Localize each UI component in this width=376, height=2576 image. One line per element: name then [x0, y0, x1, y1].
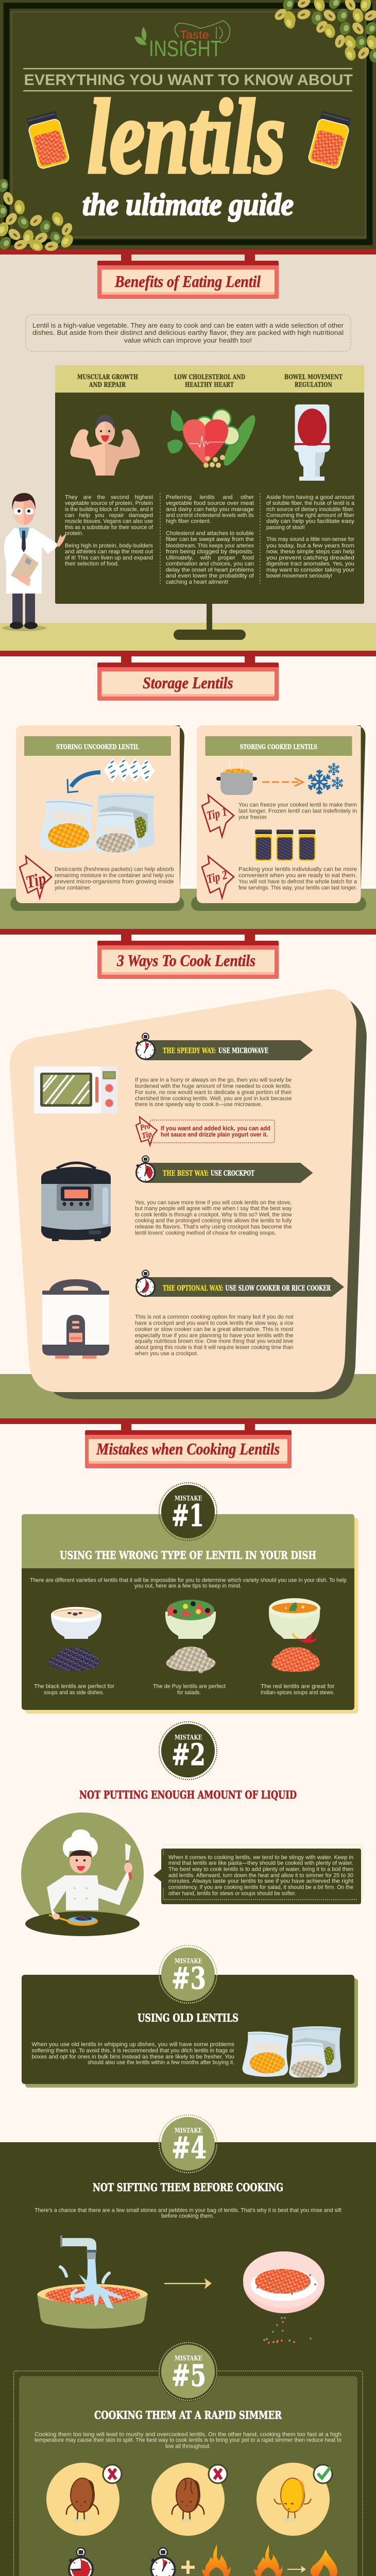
- badge: mistake 2: MISTAKE: [175, 1734, 202, 1741]
- hero frame: [6, 6, 370, 242]
- text: speedy way: cherished time cooking lentils. Well, you are just in luck because: [135, 1095, 292, 1101]
- mistake 5 text: Cooking them too long will lead to mushy and overcooked lentils. On the other hand, cooking them too fast at a high: [35, 2432, 341, 2438]
- icon: snowflakes: [307, 763, 344, 794]
- mistake 5 text: low all throughout.: [165, 2443, 211, 2449]
- tip 2 callout: [202, 856, 357, 898]
- column 3 text: you today, but a few years from: [266, 543, 354, 549]
- text: optional way: This is not a common cooking option for many but if you do not: [135, 1314, 294, 1320]
- banner: speedy way: USE MICROWAVE: [218, 1047, 268, 1055]
- arrow: packets to bags: [67, 772, 100, 792]
- icon: short timer plus flame: [151, 2544, 230, 2576]
- character: well cooked lentil: [257, 2463, 332, 2536]
- banner: optional way: USE SLOW COOKER OR RICE COOKER: [226, 1284, 331, 1293]
- text: speedy way: there is one speedy way to cook it—use microwave.: [135, 1101, 262, 1108]
- text: optional way: equally nutritious brown rice. One more thing that you would love: [135, 1338, 294, 1345]
- column 1 text: vegetable source of protein. Protein: [65, 500, 153, 506]
- badge: mistake 5: [158, 2342, 218, 2401]
- column 1 text: Being high in protein, body-builders: [65, 543, 153, 549]
- column 2 text: [166, 495, 254, 585]
- tip callout: Tip: [24, 869, 48, 892]
- column 2 text: and even lower the probability of: [166, 573, 254, 579]
- illustration: chef: [21, 1812, 144, 1936]
- text: speedy way: If you are in a hurry or always on the go, then you will surely be: [135, 1077, 292, 1083]
- column 3 text: daily can help you facilitate easy: [266, 518, 355, 524]
- speech box: mistake 2: mind that lentils are like pasta—they should be cooked with plenty of water.: [168, 1860, 353, 1866]
- mistake 1 intro: you out, here are a few tips to keep in mind.: [134, 1583, 242, 1589]
- tip callout: [20, 856, 174, 898]
- tip 2 callout: You will not have to defrost the whole batch for a: [238, 879, 357, 885]
- lentils corner: bottom left: [0, 178, 76, 253]
- column 2 text: from being clogged by deposits.: [166, 549, 254, 555]
- text: optional way: about going this route is that it will require lesser cooking time than: [135, 1345, 294, 1351]
- mistake 3 text: boxes and opt for ones in bulk bins instead as these are likely to be fresher. You: [32, 2054, 234, 2060]
- column 2 text: vegetable food source over meat: [166, 500, 254, 506]
- benefit headings: [77, 374, 343, 389]
- speech box: mistake 2: When it comes to cooking lentils, we tend to be stingy with water. Keep in: [168, 1855, 353, 1861]
- tip 1 callout: You can freeze your cooked lentil to make them: [238, 802, 357, 808]
- sign: storage: [97, 656, 279, 701]
- badge: mistake 1: MISTAKE: [175, 1495, 202, 1502]
- icon: salad bowl: [165, 1600, 216, 1639]
- text: speedy way: burdened with the huge amount of time needed to cook lentils.: [135, 1083, 292, 1089]
- logo: Taste: [180, 28, 209, 41]
- tip 1 callout: Tip 1: [205, 805, 229, 823]
- text: optional way: cooker or slow cooker can be a great alternative. This is most: [135, 1326, 294, 1332]
- panel: storing cooked lentils: STORING COOKED LENTILS: [240, 743, 317, 751]
- column 1 text: of it! This can liven up and expand: [65, 555, 153, 561]
- column 2 text: high fiber content.: [166, 518, 211, 524]
- column 1 text: and athletes can reap the most out: [65, 549, 153, 555]
- icon: red lentils: [271, 1647, 320, 1672]
- text: optional way: [134, 1314, 294, 1357]
- sign: benefits: [97, 255, 279, 299]
- column 3 text: Aside from having a good amount: [266, 495, 354, 501]
- column 2 text: and control cholesterol levels with its: [166, 512, 254, 518]
- column 3 text: now, these simple steps can help: [266, 549, 354, 555]
- mistake 3 text: [32, 2041, 235, 2066]
- column 2 text: Ultimately, with proper food: [166, 555, 254, 561]
- tip 2 callout: Packing your lentils individually can be more: [238, 867, 357, 873]
- mistake 3 heading: USING OLD LENTILS: [138, 2011, 238, 2024]
- intro text box: value which can improve your health too!: [124, 336, 252, 344]
- badge: mistake 4: #4: [172, 2130, 207, 2165]
- benefit headings: BOWEL MOVEMENT: [284, 374, 343, 381]
- text: best way: to cook lentils is through a crockpot. Why is this so? Well, the slow: [135, 1212, 292, 1218]
- badge: mistake 2: #2: [172, 1737, 206, 1772]
- mistake 4 text: [35, 2207, 341, 2219]
- icon: jars of black lentils: [254, 829, 316, 861]
- badge: mistake 3: MISTAKE: [175, 1958, 202, 1965]
- icon: right jar: [307, 111, 352, 170]
- hero title: lentils: [88, 78, 285, 195]
- tip callout: your container.: [55, 885, 91, 891]
- column 3 text: bowel movement seriously!: [266, 573, 332, 579]
- doctor figure: [2, 493, 66, 631]
- icon: crockpot: [41, 1163, 111, 1241]
- board stand: [174, 603, 246, 640]
- text: optional way: especially true if you are planning to have your lentils with the: [135, 1332, 294, 1338]
- panel: mistake 1 card: [22, 1483, 358, 1714]
- icon: curry bowl: [269, 1598, 320, 1643]
- column 2 text: and dairy can help you manage: [166, 506, 254, 513]
- intro text box: dishes. But aside from their distinct and delicious earthy flavor, they are packed with high nutritional: [32, 329, 344, 336]
- benefit headings: AND REPAIR: [89, 381, 126, 389]
- text: best way: Yes, you can save more time if you will cook lentils on the stove,: [135, 1199, 292, 1206]
- column 2 text: catching a heart ailment!: [166, 579, 229, 585]
- logo: INSIGHT: [149, 36, 221, 61]
- benefit columns: [65, 493, 355, 585]
- speech box: mistake 2: The best way to cook lentils is to add plenty of water, bring it to a boil then: [168, 1866, 353, 1872]
- text: best way: lentil lovers' cooking method of choice for creating soups.: [135, 1230, 276, 1236]
- falling stones: [263, 2317, 312, 2344]
- banner: best way: [136, 1156, 313, 1183]
- icon: de puy lentils: [166, 1647, 215, 1673]
- panel: benefits board: [55, 365, 364, 604]
- column 3 text: may want to consider taking your: [266, 567, 354, 573]
- speech box: mistake 2: consistency. If you are cooking lentils for salad, it should be a bit firm. On the: [168, 1885, 353, 1891]
- pro tip callout: Pro: [139, 1122, 151, 1132]
- pro tip callout: [136, 1117, 275, 1145]
- text: best way: release its flavors. That's why using crockpot has become the: [135, 1224, 292, 1230]
- pro tip callout: Tip: [141, 1130, 153, 1141]
- pro tip callout: hot sauce and drizzle plain yogurt over it.: [161, 1131, 268, 1138]
- tip 1 callout: last longer. Frozen lentil can last indefinitely in: [238, 808, 357, 814]
- text: best way: cooking and the prolonged cooking time allows the lentils to fully: [135, 1218, 292, 1224]
- banner: speedy way: [136, 1033, 313, 1060]
- mistake 5 heading: COOKING THEM AT A RAPID SIMMER: [94, 2409, 282, 2421]
- column 3 text: passing of stool!: [266, 524, 305, 531]
- tip 2 callout: few servings. This way, your lentils can last longer.: [238, 885, 357, 891]
- benefit headings: MUSCULAR GROWTH: [77, 374, 138, 381]
- column 3 text: digestive tract anomalies. Yes, you: [266, 561, 354, 567]
- sign: benefits: Benefits of Eating Lentil: [114, 272, 261, 291]
- captions: Indian-spices soups and stews.: [261, 1690, 335, 1696]
- character: split lentil: [151, 2463, 227, 2536]
- column 1 text: [65, 495, 153, 567]
- badge: mistake 4: [159, 2115, 217, 2173]
- pro tip callout: If you want and added kick, you can add: [161, 1125, 270, 1132]
- benefit headings: HEALTHY HEART: [185, 381, 234, 389]
- captions: The de Puy lentils are perfect: [153, 1684, 226, 1690]
- panel: mistake 3 card: [22, 1945, 358, 2088]
- column 3 text: of soluble fiber, the husk of lentil is a: [266, 500, 355, 506]
- sign: mistakes: Mistakes when Cooking Lentils: [96, 1439, 280, 1458]
- column 3 text: rich source of dietary insoluble fiber.: [266, 506, 354, 513]
- lentils corner: top right: [272, 0, 376, 62]
- text: speedy way: For sure, no one would want to dedicate a great portion of their: [135, 1089, 292, 1095]
- badge: mistake 5: MISTAKE: [175, 2354, 202, 2363]
- badge: mistake 4: MISTAKE: [175, 2127, 202, 2135]
- column 2 text: Cholesterol and attaches to soluble: [166, 531, 254, 537]
- column 1 text: can help you repair damaged: [65, 512, 153, 518]
- captions: The red lentils are great for: [261, 1684, 335, 1690]
- captions: soups and as side dishes.: [44, 1690, 104, 1696]
- mistake 4 text: There's a chance that there are a few small stones and pebbles in your bag of lentils. That's why it is best that you rinse and sift: [35, 2207, 341, 2213]
- column 1 text: is the building block of muscle, and it: [65, 506, 153, 513]
- column 1 text: this as a substitute for their source of: [65, 524, 153, 531]
- speech box: mistake 2: minutes. Always taste your lentils to see if you have achieved the right: [168, 1878, 353, 1885]
- panel: mistake 5: [13, 2342, 363, 2576]
- icon: black lentils: [49, 1648, 100, 1671]
- captions: The black lentils are perfect for: [34, 1684, 114, 1690]
- icon: muscle man: [70, 415, 140, 476]
- benefit headings: REGULATION: [295, 381, 332, 389]
- banner: best way: THE BEST WAY:: [163, 1170, 209, 1178]
- panel: storing uncooked lentil: STORING UNCOOKED LENTIL: [56, 743, 139, 751]
- banner: speedy way: THE SPEEDY WAY:: [163, 1047, 216, 1055]
- text: best way: but many people will agree with me when I say that the best way: [135, 1206, 292, 1212]
- speech box: mistake 2: add lentils. Afterward, turn down the heat and allow it to simmer for 25 to 30: [168, 1872, 353, 1878]
- benefit headings: LOW CHOLESTEROL AND: [174, 374, 245, 381]
- mistake 3 text: softening them up. To avoid this, it is recommended that you ditch lentils in bags or: [32, 2047, 234, 2054]
- badge: mistake 1: [159, 1483, 217, 1540]
- column 2 text: Preferring lentils and other: [166, 495, 254, 501]
- logo: [134, 21, 230, 61]
- text: best way: [135, 1199, 292, 1236]
- column 1 text: their selection of food.: [65, 561, 119, 567]
- column 2 text: combination and choices, you can: [166, 561, 254, 567]
- mistake 3 text: should also use the lentils within a few months after buying it.: [88, 2060, 234, 2066]
- icon: soup bowl: [51, 1607, 101, 1639]
- icon: left jar: [26, 111, 70, 170]
- column 2 text: fiber can be swept away from the: [166, 536, 254, 543]
- captions: [34, 1684, 335, 1696]
- icon: cooking pot: [216, 759, 257, 795]
- badge: mistake 3: [159, 1945, 217, 2003]
- badge: mistake 3: #3: [172, 1961, 206, 1996]
- panel: 3 ways card: [10, 989, 367, 1399]
- column 1 text: protein.: [65, 531, 83, 537]
- speech box: mistake 2: [153, 1845, 363, 1904]
- column 2 text: delay the onset of heart problems: [166, 567, 254, 573]
- sign: mistakes: [85, 1424, 292, 1468]
- text: optional way: have a crockpot and you want to cook lentils the slow way, a rice: [135, 1320, 294, 1326]
- badge: mistake 5: #5: [172, 2358, 206, 2393]
- tip 2 callout: convenient when you are ready to eat them.: [238, 873, 357, 879]
- icon: rice cooker: [42, 1279, 109, 1359]
- column 3 text: [266, 495, 355, 579]
- text: speedy way: [135, 1077, 292, 1108]
- banner: optional way: THE OPTIONAL WAY:: [163, 1284, 224, 1293]
- tip callout: Desiccants (freshness packets) can help absorb: [55, 867, 174, 873]
- tip callout: prevent micro-organisms from growing inside: [55, 879, 174, 885]
- mistake 3 text: When you use old lentils in whipping up dishes, you will have some problems: [32, 2041, 235, 2047]
- panel: storing uncooked lentil: [10, 725, 184, 911]
- mistake 4 text: before cooking them.: [161, 2213, 214, 2219]
- icon: lentil bags: [39, 793, 155, 853]
- illustration: sieve with stones: [243, 2251, 324, 2313]
- character: overcooked lentil: [46, 2463, 122, 2536]
- hero kicker: EVERYTHING YOU WANT TO KNOW ABOUT: [24, 72, 353, 89]
- column 3 text: you prevent catching dreaded: [266, 555, 354, 561]
- icon: heart and vegetables: [167, 410, 260, 469]
- sign: 3 ways: [97, 935, 279, 979]
- icon: desiccant packets: [104, 757, 155, 783]
- mistake 2 heading: NOT PUTTING ENOUGH AMOUNT OF LIQUID: [79, 1788, 297, 1801]
- banner: optional way: [136, 1270, 344, 1297]
- icon: long timer: [69, 2548, 93, 2576]
- sign: storage: Storage Lentils: [143, 673, 233, 692]
- column 2 text: bloodstream. This keeps your arteries: [166, 543, 254, 549]
- column 1 text: muscle tissues. Vegans can also use: [65, 518, 153, 524]
- banner: best way: USE CROCKPOT: [211, 1170, 254, 1178]
- badge: mistake 2: [159, 1722, 217, 1780]
- text: optional way: when you use a crockpot.: [134, 1351, 198, 1357]
- arrow: rinse to sift: [164, 2278, 212, 2289]
- column 3 text: Consuming the right amount of fiber: [266, 512, 354, 518]
- sign: 3 ways: 3 Ways To Cook Lentils: [116, 951, 255, 970]
- icon: microwave: [34, 1066, 117, 1113]
- mistake 1 intro: There are different varieties of lentils that it will be impossible for you to determine which variety should you use in your dish. To help: [30, 1578, 347, 1584]
- intro text box: Lentil is a high-value vegetable. They are easy to cook and can be eaten with a wide selection of other: [32, 321, 344, 329]
- intro text box: [26, 315, 351, 351]
- tip 1 callout: your freezer.: [238, 814, 268, 820]
- mistake 1 intro: [30, 1578, 347, 1589]
- captions: for salads.: [177, 1690, 201, 1696]
- tip 2 callout: Tip 2: [206, 869, 229, 886]
- tip callout: remaining moisture in the container and help you: [55, 873, 174, 879]
- mistake 4 heading: NOT SIFTING THEM BEFORE COOKING: [93, 2181, 283, 2194]
- icon: high flame to low flame: [254, 2544, 337, 2576]
- icon: toilet: [294, 404, 330, 481]
- mistake 5 text: temperature may cause their skin to split. The best way to cook lentils is to bring your pot to a rapid simmer then reduce heat to: [35, 2437, 341, 2443]
- badge: mistake 1: #1: [172, 1498, 204, 1533]
- icon: lentil bags: [243, 2026, 341, 2077]
- tip 1 callout: [202, 795, 357, 837]
- mistake 5 text: [35, 2432, 341, 2449]
- speech box: mistake 2: other hand, lentils for stews or soups should be softer.: [168, 1891, 296, 1897]
- column 3 text: This may sound a little non-sense for: [266, 536, 354, 543]
- hero subtitle: the ultimate guide: [82, 188, 294, 222]
- illustration: faucet rinsing lentils in bowl: [37, 2235, 148, 2329]
- column 1 text: They are the second highest: [65, 495, 153, 501]
- panel: storing cooked lentils: [191, 725, 366, 911]
- arrow: freeze: [262, 778, 303, 786]
